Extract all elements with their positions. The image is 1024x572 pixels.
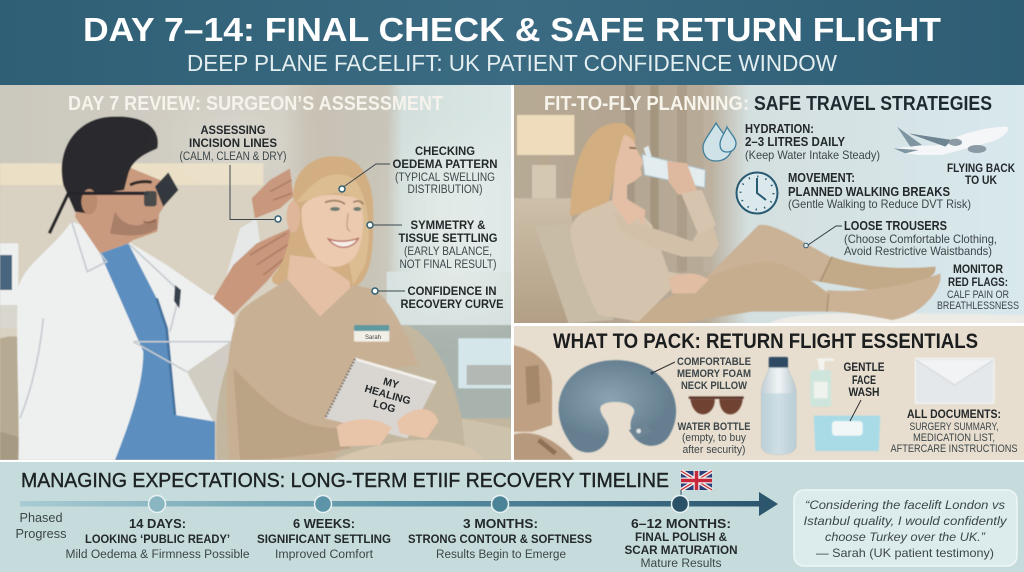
callout: confidence in recovery curve: RECOVERY CURVE — [400, 297, 504, 311]
icon: plane — [894, 127, 1008, 155]
callout: loose trousers: (Choose Comfortable Clothing, — [844, 232, 997, 246]
photo: surgeon examining patient — [0, 82, 517, 463]
callout: neck pillow: NECK PILLOW — [681, 380, 748, 392]
callout: symmetry and tissue settling: (EARLY BALANCE, — [404, 246, 492, 258]
panel 2 heading — [544, 93, 992, 115]
surgeon hands — [213, 228, 292, 315]
quote card — [794, 490, 1017, 566]
timeline arrow — [20, 492, 778, 516]
callout: neck pillow: MEMORY FOAM — [677, 368, 751, 380]
milestone: 3 months: 3 MONTHS: — [463, 516, 538, 531]
sunglasses — [689, 394, 744, 401]
patient — [272, 156, 373, 288]
timeline heading: MANAGING EXPECTATIONS: LONG-TERM ETIIF RECOVERY TIMELINE — [21, 470, 669, 492]
callout: oedema pattern: (TYPICAL SWELLING — [395, 172, 495, 184]
callout: red flags — [937, 264, 1019, 312]
callout: neck pillow — [650, 356, 751, 392]
label: all documents — [890, 409, 1018, 455]
text: movement — [788, 171, 971, 211]
milestone: 14 days — [66, 516, 250, 561]
callout: oedema pattern: CHECKING — [415, 144, 475, 158]
label: all documents: ALL DOCUMENTS: — [907, 409, 1001, 421]
icon: UK flag — [681, 471, 712, 503]
callout: red flags: CALF PAIN OR — [947, 289, 1009, 301]
panel 1 heading: DAY 7 REVIEW: SURGEON’S ASSESSMENT — [68, 93, 443, 115]
callout: incision lines: (CALM, CLEAN & DRY) — [180, 151, 287, 163]
milestone: 3 months — [408, 516, 592, 561]
milestone: 6-12 months: SCAR MATURATION — [624, 545, 738, 557]
label: flying back to UK: TO UK — [965, 175, 998, 187]
label: water bottle — [678, 421, 750, 456]
callout: oedema pattern: DISTRIBUTION) — [408, 184, 483, 196]
milestone: 6 weeks: SIGNIFICANT SETTLING — [257, 534, 391, 546]
milestone: 3 months: STRONG CONTOUR & SOFTNESS — [408, 534, 592, 546]
milestone: 3 months: Results Begin to Emerge — [436, 549, 566, 561]
callout: confidence in recovery curve: CONFIDENCE IN — [408, 284, 496, 298]
label: all documents: MEDICATION LIST, — [913, 432, 995, 444]
illustrations: packed items — [512, 345, 994, 460]
callout: incision lines: ASSESSING — [200, 123, 266, 137]
quote card: — Sarah (UK patient testimony) — [816, 546, 994, 560]
callout: neck pillow: COMFORTABLE — [677, 356, 751, 368]
text: hydration — [745, 122, 880, 162]
coat — [17, 222, 235, 460]
panel: day 7 review — [0, 82, 517, 463]
milestone: 6-12 months: 6–12 MONTHS: — [631, 516, 731, 531]
label: all documents: SURGERY SUMMARY, — [910, 421, 998, 433]
pump bottle — [817, 358, 834, 370]
label: phased progress — [16, 511, 66, 541]
panel 2 heading: SAFE TRAVEL STRATEGIES — [754, 93, 992, 115]
head — [570, 123, 635, 217]
callout: red flags: MONITOR — [953, 264, 1004, 276]
callout: gentle face wash: GENTLE — [844, 360, 884, 374]
callout: gentle face wash: WASH — [848, 385, 880, 399]
milestone: 6-12 months — [624, 516, 738, 570]
envelope — [915, 358, 994, 403]
torso — [570, 198, 685, 322]
icon: clock — [736, 172, 778, 214]
callout: red flags: RED FLAGS: — [948, 277, 1008, 289]
milestone: 14 days: LOOKING ‘PUBLIC READY’ — [85, 534, 230, 546]
text: movement: MOVEMENT: — [788, 171, 855, 185]
milestone: 6-12 months: FINAL POLISH & — [635, 532, 727, 544]
halo behind callout text — [190, 130, 500, 305]
text: hydration: (Keep Water Intake Steady) — [745, 148, 880, 162]
neck pillow — [579, 381, 655, 432]
milestone: 14 days: 14 DAYS: — [129, 516, 186, 531]
label: water bottle: (empty, to buy — [682, 432, 746, 444]
text: hydration: HYDRATION: — [745, 122, 814, 136]
quote card: choose Turkey over the UK.” — [825, 530, 986, 544]
surgeon head — [75, 165, 168, 253]
panel 3 background — [514, 326, 1024, 460]
text: hydration: 2–3 LITRES DAILY — [745, 135, 846, 149]
label: water bottle: WATER BOTTLE — [678, 421, 750, 433]
callout: loose trousers — [804, 219, 997, 258]
healing log notebook title: HEALING — [363, 383, 412, 407]
milestone: 14 days: Mild Oedema & Firmness Possible — [66, 549, 250, 561]
quote card: Istanbul quality, I would confidently — [804, 514, 1008, 528]
wipes — [814, 416, 880, 451]
timeline markers — [148, 496, 688, 512]
panel 2 heading: FIT-TO-FLY PLANNING: — [544, 93, 749, 115]
panel: fit-to-fly planning — [509, 82, 1024, 328]
callout: gentle face wash: FACE — [852, 373, 876, 387]
text: movement: PLANNED WALKING BREAKS — [788, 185, 950, 199]
callout: gentle face wash — [844, 360, 884, 421]
callout: confidence in recovery curve — [372, 284, 504, 311]
legs — [769, 313, 1024, 328]
label: flying back to UK: FLYING BACK — [947, 163, 1016, 175]
callout: loose trousers: Avoid Restrictive Waistbands) — [844, 244, 992, 258]
milestone: 6 weeks: 6 WEEKS: — [293, 516, 355, 531]
healing log notebook title: LOG — [372, 398, 397, 416]
quote card: “Considering the facelift London vs — [805, 498, 1005, 512]
subtitle: DEEP PLANE FACELIFT: UK PATIENT CONFIDENCE WINDOW — [187, 50, 837, 76]
milestone: 6-12 months: Mature Results — [640, 558, 722, 570]
panel 3 heading: WHAT TO PACK: RETURN FLIGHT ESSENTIALS — [553, 330, 978, 353]
water bottle — [769, 357, 788, 369]
timeline background — [0, 462, 1024, 572]
callout: loose trousers: LOOSE TROUSERS — [844, 219, 947, 233]
name tag: Sarah — [365, 335, 381, 341]
healing log notebook title: MY — [382, 376, 400, 391]
label: phased progress: Progress — [16, 527, 66, 541]
healing log notebook title — [360, 371, 415, 419]
callout: oedema pattern — [339, 144, 498, 196]
callout: symmetry and tissue settling: NOT FINAL RESULT) — [400, 259, 497, 271]
callout: symmetry and tissue settling — [367, 218, 498, 271]
callout: symmetry and tissue settling: SYMMETRY & — [410, 218, 486, 232]
bottle and hand — [642, 154, 705, 188]
icon: water drops — [703, 123, 736, 161]
title: DAY 7–14: FINAL CHECK & SAFE RETURN FLIGHT — [83, 11, 941, 48]
label: flying back to UK — [947, 163, 1016, 187]
callout: incision lines — [180, 123, 287, 222]
photo: patient drinking water on bed — [509, 82, 1024, 328]
callout: oedema pattern: OEDEMA PATTERN — [392, 157, 498, 171]
callout: symmetry and tissue settling: TISSUE SETTLING — [398, 231, 498, 245]
panel: what to pack — [512, 326, 1024, 460]
label: phased progress: Phased — [20, 511, 63, 525]
text: movement: (Gentle Walking to Reduce DVT Risk) — [788, 197, 971, 211]
label: water bottle: after security) — [682, 444, 746, 456]
callout: incision lines: INCISION LINES — [189, 136, 277, 150]
panel: recovery timeline — [0, 462, 1024, 572]
milestone: 6 weeks — [257, 516, 391, 561]
header banner — [0, 0, 1024, 85]
milestone: 6 weeks: Improved Comfort — [275, 549, 374, 561]
